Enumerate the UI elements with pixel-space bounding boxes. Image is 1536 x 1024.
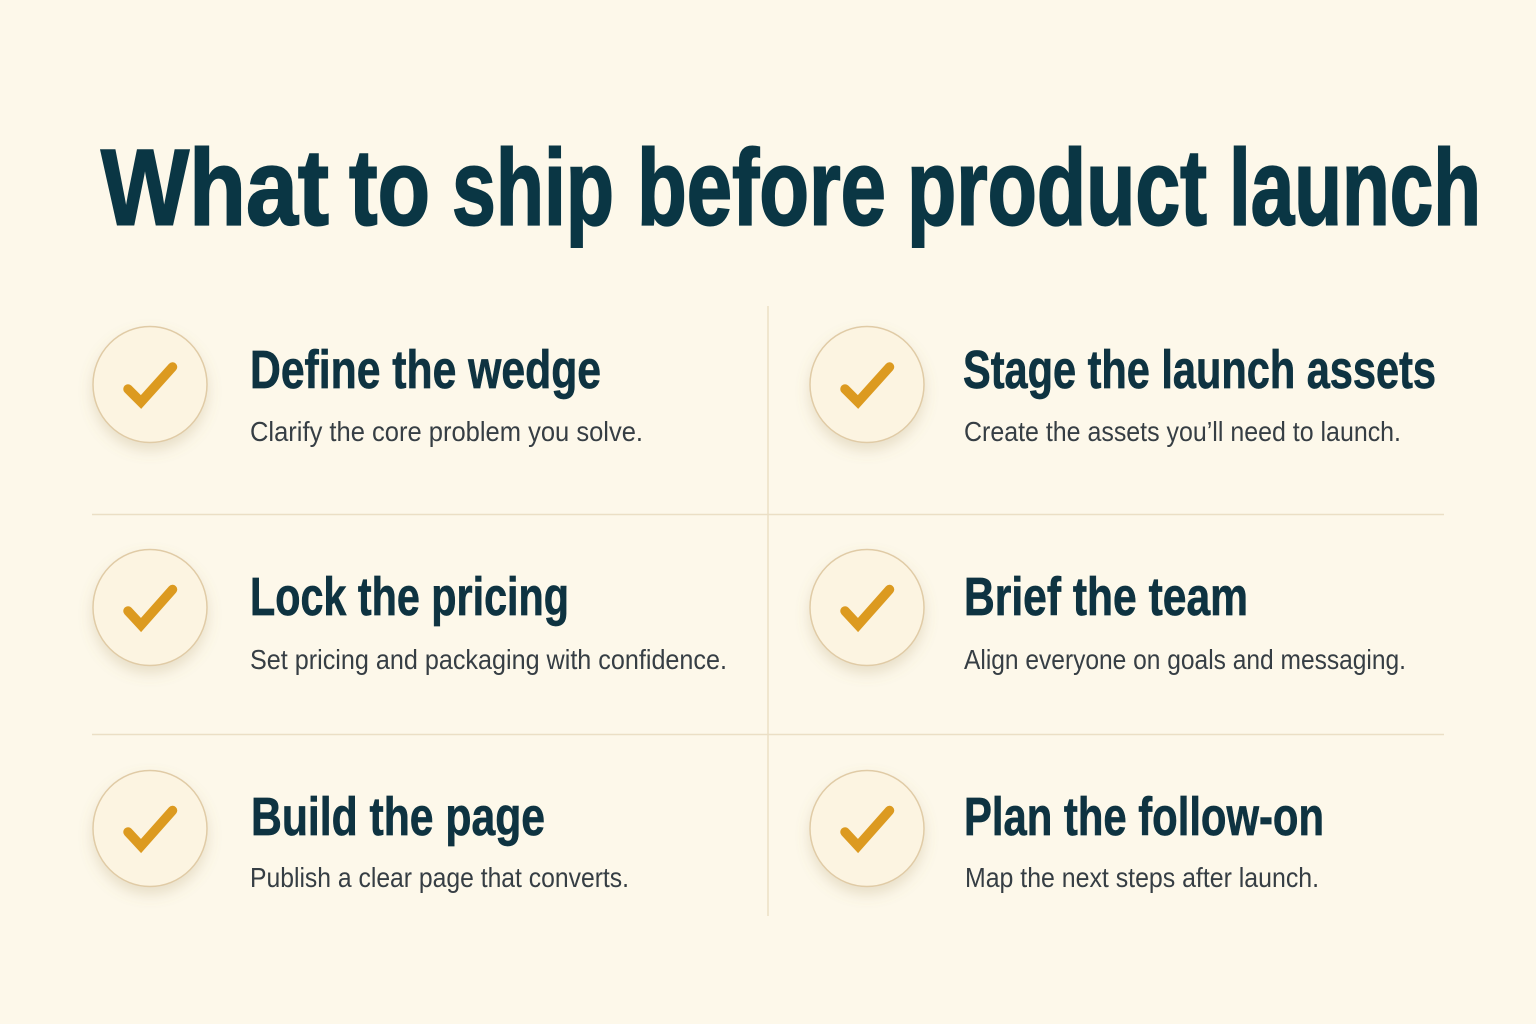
icon: check badge — [810, 770, 924, 886]
heading: Define the wedge — [250, 340, 601, 400]
item: Lock the pricing — [93, 550, 727, 675]
description: Clarify the core problem you solve. — [250, 416, 643, 447]
heading: Lock the pricing — [250, 567, 569, 627]
icon: check badge — [810, 550, 924, 666]
heading: Brief the team — [964, 567, 1248, 627]
icon: check badge — [93, 550, 207, 666]
item: Define the wedge — [93, 326, 643, 447]
title: What — [101, 126, 329, 248]
title: product — [907, 126, 1207, 248]
icon: check badge — [93, 326, 207, 442]
heading: Plan the follow-on — [964, 787, 1324, 847]
title: ship — [452, 126, 614, 248]
icon: check badge — [810, 326, 924, 442]
heading: Build the page — [251, 787, 545, 847]
description: Set pricing and packaging with confidence. — [250, 644, 727, 675]
description: Align everyone on goals and messaging. — [964, 644, 1406, 675]
description: Publish a clear page that converts. — [250, 862, 629, 893]
item: Build the page — [93, 770, 629, 893]
description: Create the assets you’ll need to launch. — [964, 416, 1401, 447]
title — [101, 126, 1481, 248]
icon: check badge — [93, 770, 207, 886]
title: to — [349, 126, 430, 248]
description: Map the next steps after launch. — [965, 862, 1319, 893]
item: Plan the follow-on — [810, 770, 1324, 893]
title: before — [637, 126, 886, 248]
item: Brief the team — [810, 550, 1406, 675]
item: Stage the launch assets — [810, 326, 1436, 447]
